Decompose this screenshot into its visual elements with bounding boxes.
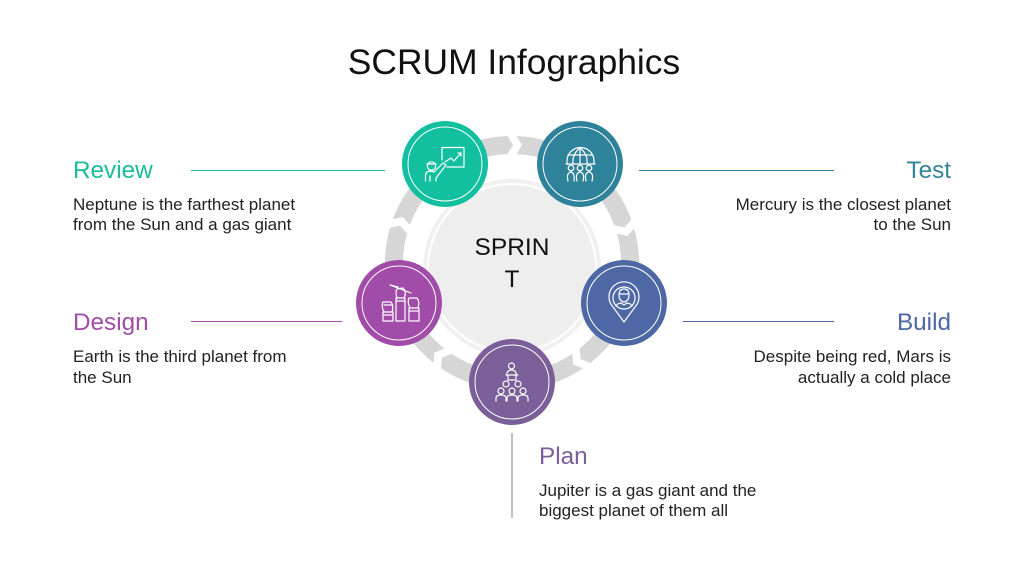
connector: build — [683, 320, 834, 322]
text block: review — [73, 157, 295, 234]
text block: plan: biggest planet of them all — [539, 501, 728, 520]
node: review — [402, 121, 488, 207]
text block: test: to the Sun — [873, 215, 951, 234]
connector: test — [639, 170, 834, 172]
connector: design — [191, 320, 342, 322]
center disc: sprint: T — [505, 266, 520, 293]
text block: plan — [539, 443, 756, 520]
text block: plan: Jupiter is a gas giant and the — [539, 481, 756, 500]
text block: build: Despite being red, Mars is — [754, 347, 951, 366]
node: plan — [469, 339, 555, 425]
icon: globe with people — [566, 148, 595, 181]
text block: review: Review — [73, 157, 153, 184]
text block: build: actually a cold place — [798, 368, 951, 387]
text block: build: Build — [897, 309, 951, 336]
text block: plan: Plan — [539, 443, 588, 470]
center disc: sprint: SPRIN — [475, 234, 549, 261]
node: design — [356, 260, 442, 346]
text block: design: Design — [73, 309, 149, 336]
text block: build — [754, 309, 951, 387]
text block: design: Earth is the third planet from — [73, 347, 287, 366]
center disc: sprint — [419, 175, 605, 361]
connector: review — [191, 170, 385, 172]
text block: review: from the Sun and a gas giant — [73, 215, 292, 234]
connector: plan — [511, 433, 513, 518]
icon: raised fists — [382, 285, 419, 321]
icon: presenter with chart — [426, 148, 464, 181]
text block: design: the Sun — [73, 368, 132, 387]
text block: test — [736, 157, 951, 234]
icon: speaker and audience — [496, 363, 528, 401]
text block: review: Neptune is the farthest planet — [73, 195, 295, 214]
node: build — [581, 260, 667, 346]
cycle arrows ring — [383, 130, 642, 381]
text block: design — [73, 309, 287, 387]
icon: location pin with person — [609, 282, 639, 322]
title: SCRUM Infographics — [348, 42, 680, 82]
text block: test: Test — [906, 157, 951, 184]
text block: test: Mercury is the closest planet — [736, 195, 951, 214]
node: test — [537, 121, 623, 207]
